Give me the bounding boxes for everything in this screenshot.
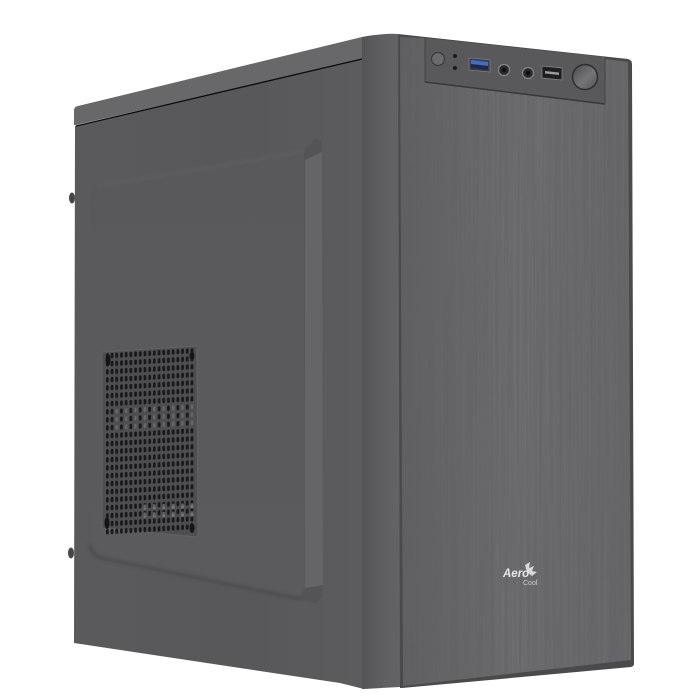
recessed side panel [90, 139, 323, 603]
control strip [425, 38, 605, 104]
front bezel outline [398, 34, 634, 688]
raised rib [300, 139, 323, 603]
reset knob [572, 64, 598, 90]
side panel of the case [74, 37, 364, 689]
power button [432, 52, 444, 66]
logo word Aero: Aero [502, 568, 529, 580]
audio jack 1 [498, 64, 510, 76]
top gap line [76, 59, 362, 126]
logo fan mark [525, 562, 537, 576]
audio jack 2 [522, 68, 534, 78]
LED indicators [453, 54, 457, 70]
AeroCool logo [502, 562, 538, 587]
logo word Cool: Cool [523, 580, 538, 587]
rear foot top [69, 192, 75, 204]
vent grille [102, 346, 198, 537]
top strip [74, 37, 362, 125]
vent lit holes [109, 403, 195, 432]
rounded front corner [362, 34, 403, 689]
vent lit holes lower [143, 502, 195, 519]
USB 2.0 port [542, 66, 562, 80]
brushed front panel [400, 30, 635, 690]
rear foot bottom [68, 548, 74, 558]
vent corner screws [104, 352, 194, 533]
illustration: AeroCool mini tower PC case [68, 34, 634, 689]
USB 3.0 port [469, 58, 490, 72]
